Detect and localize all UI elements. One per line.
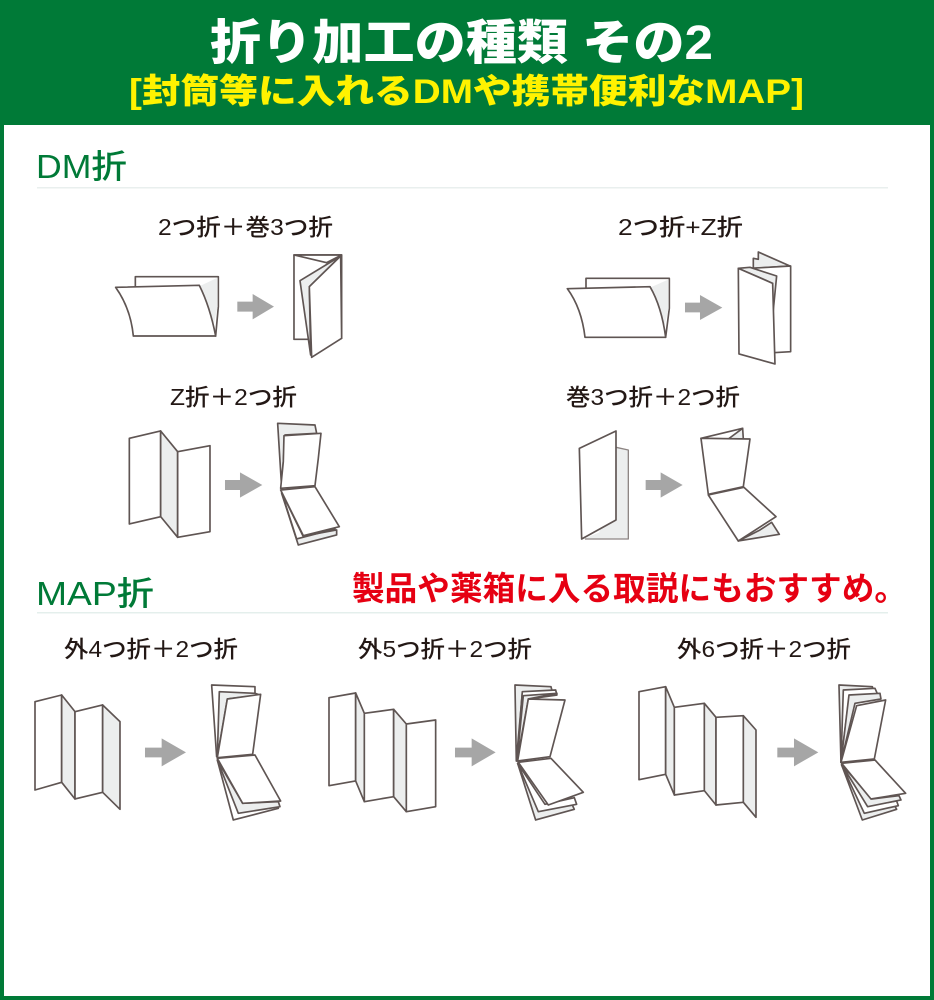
diagram: 2-fold + Z-fold [567,252,791,364]
header band [0,0,934,125]
label: roll 3-fold + 2-fold: 巻3つ折＋2つ折 [566,384,740,410]
diagram: outer 4-fold + 2-fold [35,685,281,820]
label: outer 4-fold + 2-fold: 外4つ折＋2つ折 [64,636,238,662]
callout: recommendation: 製品や薬箱に入る取説にもおすすめ。 [352,570,907,607]
diagram: outer 6-fold + 2-fold [639,685,906,820]
section: MAP fold diagrams [35,636,906,820]
section: DM fold diagrams [116,214,791,545]
title: 折り加工の種類 その2 [210,17,713,70]
subtitle: [封筒等に入れるDMや携帯便利なMAP] [129,73,804,111]
diagram: Z-fold + 2-fold [129,423,339,545]
diagram: outer 5-fold + 2-fold [329,685,583,820]
diagram: roll 3-fold + 2-fold [579,428,779,541]
label: 2-fold + roll 3-fold: 2つ折＋巻3つ折 [158,214,333,240]
section heading: DM fold: DM折 [36,148,127,185]
label: outer 6-fold + 2-fold: 外6つ折＋2つ折 [677,636,851,662]
diagram: 2-fold + roll 3-fold [116,255,342,357]
section heading: MAP fold: MAP折 [36,575,154,612]
label: outer 5-fold + 2-fold: 外5つ折＋2つ折 [358,636,532,662]
label: Z-fold + 2-fold: Z折＋2つ折 [170,384,297,410]
label: 2-fold + Z-fold: 2つ折+Z折 [618,214,743,240]
